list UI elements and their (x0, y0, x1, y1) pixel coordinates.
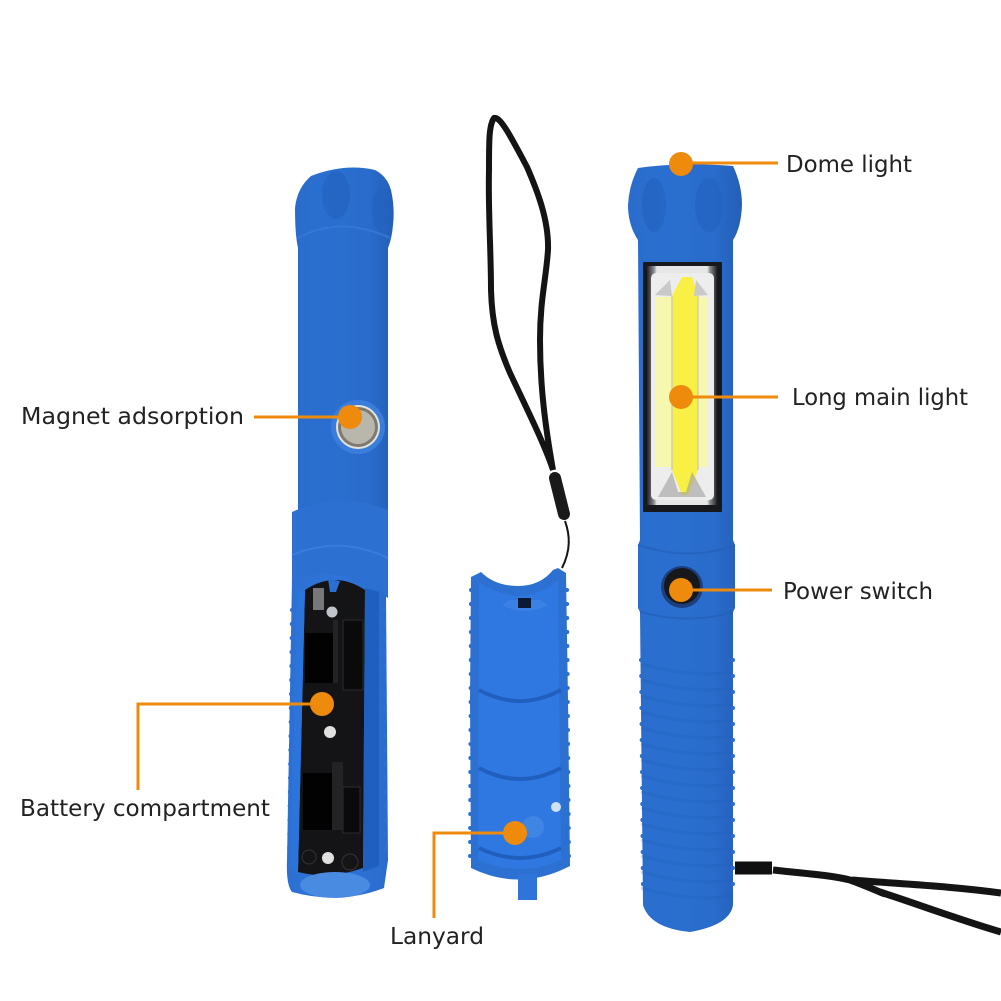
open battery body (287, 574, 388, 898)
collar (292, 500, 388, 598)
long main light (643, 262, 722, 512)
body edge ribs right (384, 610, 386, 860)
icon: magnet (331, 400, 385, 454)
callout: battery compartment: Battery compartment (20, 796, 270, 822)
battery compartment (290, 579, 379, 875)
callout: battery compartment (20, 692, 334, 822)
callout: power switch: Power switch (783, 579, 933, 605)
ribbed grip (641, 664, 733, 898)
battery cover (470, 568, 570, 900)
callout: magnet adsorption: Magnet adsorption (21, 404, 244, 430)
grip edge ribs (641, 660, 733, 895)
icon: power switch (661, 566, 703, 608)
callout: lanyard: Lanyard (390, 924, 484, 950)
flashlight: front view with lights (628, 164, 742, 932)
callout: dome light (669, 152, 912, 178)
lanyard strap: loop above the cover (489, 118, 569, 568)
callout: lanyard (390, 821, 527, 950)
end cap (300, 872, 370, 898)
cover edge ribs (470, 590, 569, 860)
left wall (290, 590, 305, 872)
flashlight: rear view with magnet (287, 168, 394, 898)
collar seam (638, 545, 735, 618)
callout: dome light: Dome light (786, 152, 912, 178)
springs (313, 588, 324, 610)
lanyard sleeve lower (735, 862, 772, 874)
right wall (363, 588, 379, 872)
body edge ribs (289, 610, 292, 860)
callout: power switch (669, 578, 933, 605)
head grip ovals front (642, 178, 723, 232)
lanyard strap: lower right (735, 868, 1001, 932)
head grip ovals (322, 171, 390, 232)
callout: long main light: Long main light (792, 385, 968, 411)
callout: long main light (669, 385, 968, 411)
callout: magnet adsorption (21, 404, 362, 430)
lanyard sleeve (555, 478, 564, 514)
